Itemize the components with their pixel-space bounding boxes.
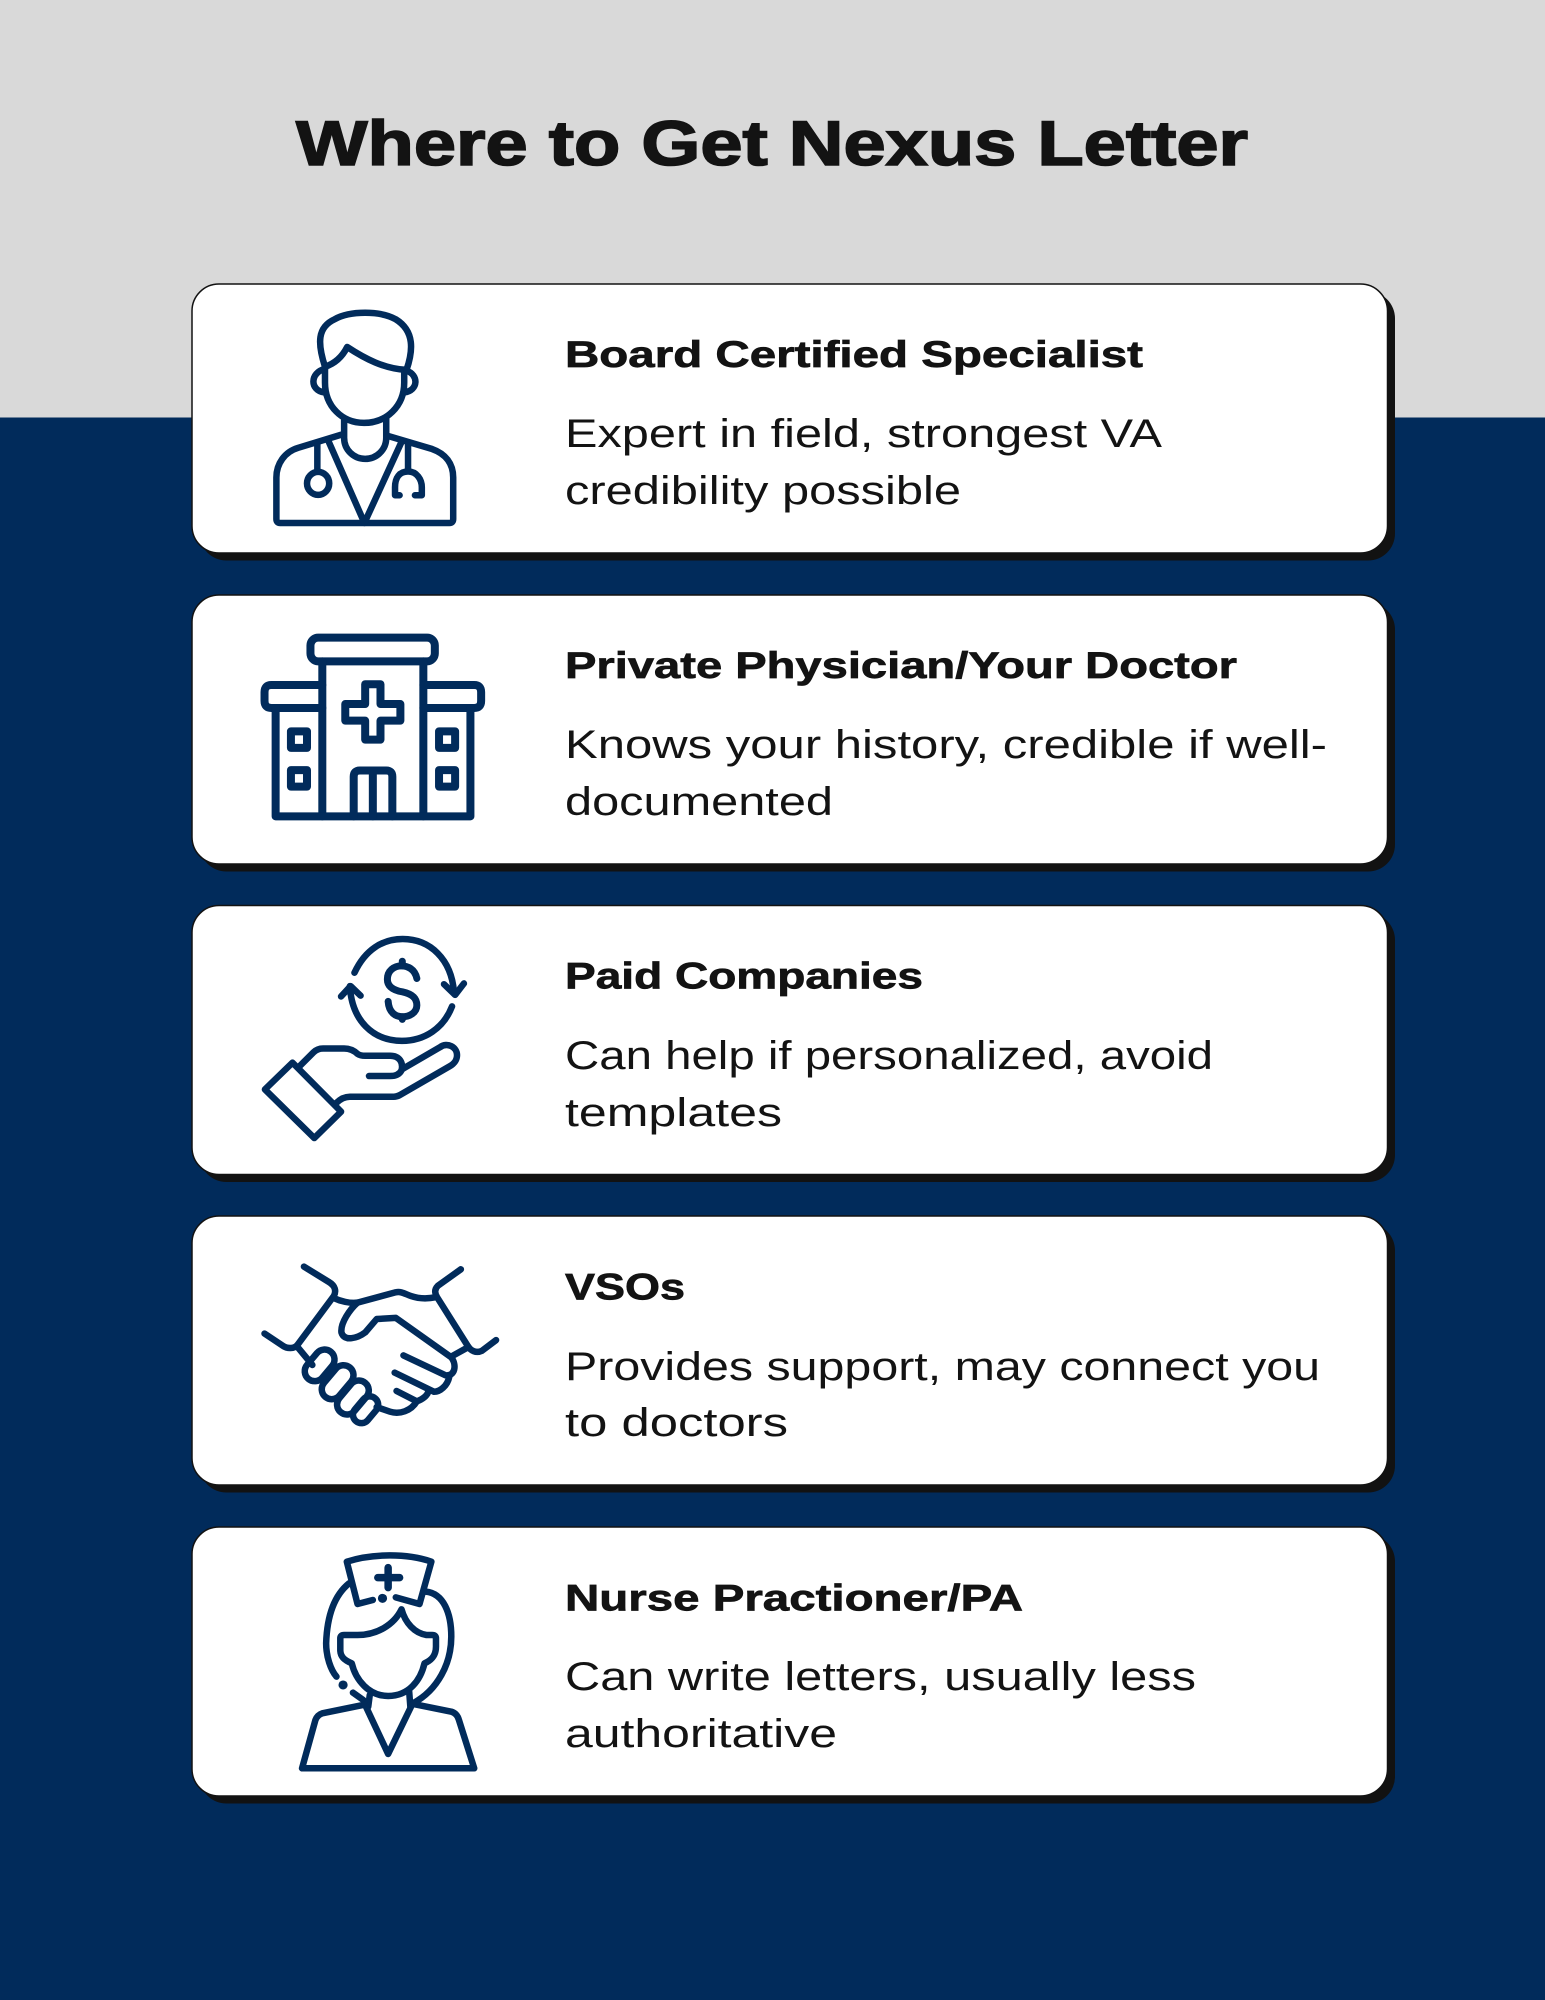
panel: VSOs (192, 1216, 1395, 1492)
description: Knows your history, credible if well- (565, 723, 1327, 767)
heading: Board Certified Specialist (565, 334, 1143, 375)
panel: board certified specialist (192, 284, 1395, 560)
description (565, 1034, 1213, 1135)
description (565, 723, 1327, 824)
icon: nurse (302, 1555, 474, 1768)
description (565, 1345, 1320, 1445)
icon: hospital (265, 638, 481, 816)
title: Where to Get Nexus Letter (296, 109, 1248, 179)
heading: VSOs (565, 1266, 685, 1308)
description: Can help if personalized, avoid (565, 1034, 1213, 1078)
icon: doctor (276, 313, 453, 523)
panel: nurse practitioner (192, 1527, 1395, 1804)
heading: Private Physician/Your Doctor (565, 645, 1237, 686)
description: templates (565, 1091, 782, 1135)
panel: private physician (192, 595, 1395, 872)
description (565, 1655, 1196, 1756)
description: authoritative (565, 1712, 837, 1756)
description (565, 412, 1162, 513)
icon: hand with money (265, 939, 464, 1138)
description: Provides support, may connect you (565, 1345, 1320, 1389)
description: Expert in field, strongest VA (565, 412, 1162, 456)
icon: handshake (265, 1267, 496, 1427)
heading: Paid Companies (565, 956, 923, 996)
description: Can write letters, usually less (565, 1655, 1196, 1699)
description: documented (565, 780, 833, 824)
description: to doctors (565, 1401, 788, 1445)
heading: Nurse Practioner/PA (565, 1578, 1023, 1618)
panel: paid companies (192, 906, 1395, 1182)
grey header band (0, 0, 1545, 418)
description: credibility possible (565, 469, 961, 513)
